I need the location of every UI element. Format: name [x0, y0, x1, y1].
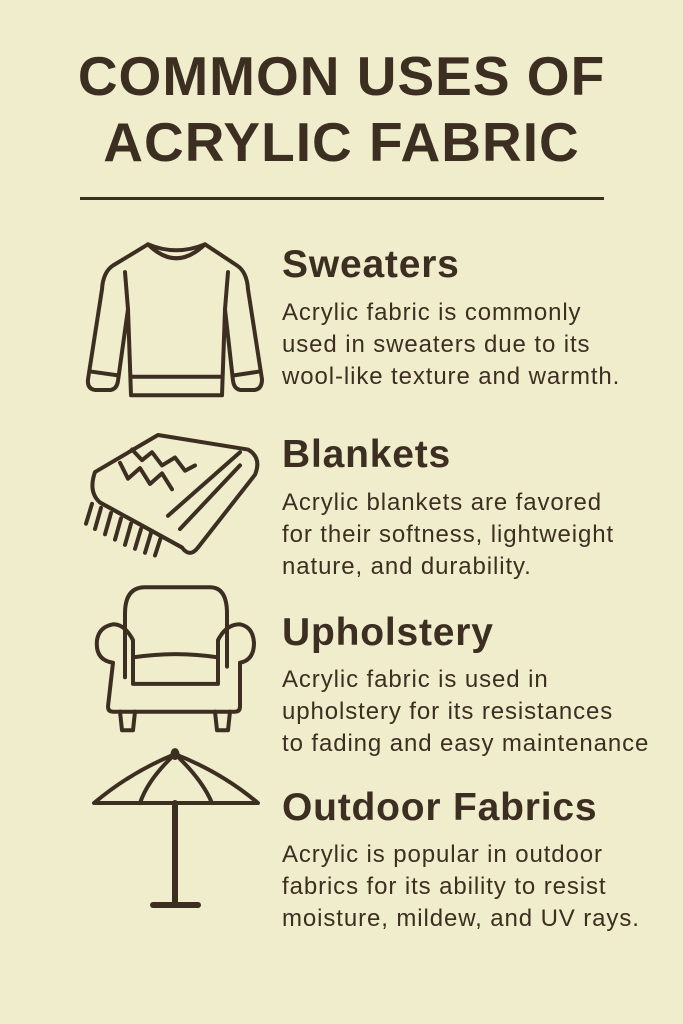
text: blankets: Acrylic blankets are favored: [282, 489, 602, 516]
icon: umbrella: [94, 751, 258, 905]
title: COMMON USES OF: [78, 45, 605, 107]
text: sweaters: used in sweaters due to its: [282, 331, 590, 358]
title: [78, 45, 605, 173]
text: outdoor fabrics: [282, 841, 640, 932]
icon: blanket: [86, 435, 257, 555]
divider: [80, 197, 604, 200]
text: outdoor fabrics: fabrics for its ability to resist: [282, 873, 606, 900]
text: upholstery: to fading and easy maintenance: [282, 730, 649, 757]
heading: sweaters: Sweaters: [282, 243, 460, 286]
title: ACRYLIC FABRIC: [103, 111, 580, 173]
text: upholstery: upholstery for its resistances: [282, 698, 613, 725]
text: upholstery: Acrylic fabric is used in: [282, 666, 549, 693]
text: outdoor fabrics: moisture, mildew, and UV rays.: [282, 905, 640, 932]
heading: outdoor fabrics: Outdoor Fabrics: [282, 786, 597, 829]
text: outdoor fabrics: Acrylic is popular in outdoor: [282, 841, 603, 868]
heading: blankets: Blankets: [282, 433, 451, 476]
icon: armchair: [97, 587, 254, 730]
heading: upholstery: Upholstery: [282, 611, 494, 654]
text: sweaters: wool-like texture and warmth.: [282, 363, 620, 390]
text: blankets: for their softness, lightweight: [282, 521, 614, 548]
text: upholstery: [282, 666, 649, 757]
text: sweaters: [282, 299, 620, 390]
text: blankets: [282, 489, 614, 580]
text: sweaters: Acrylic fabric is commonly: [282, 299, 581, 326]
icon: sweater: [88, 244, 262, 395]
text: blankets: nature, and durability.: [282, 553, 532, 580]
